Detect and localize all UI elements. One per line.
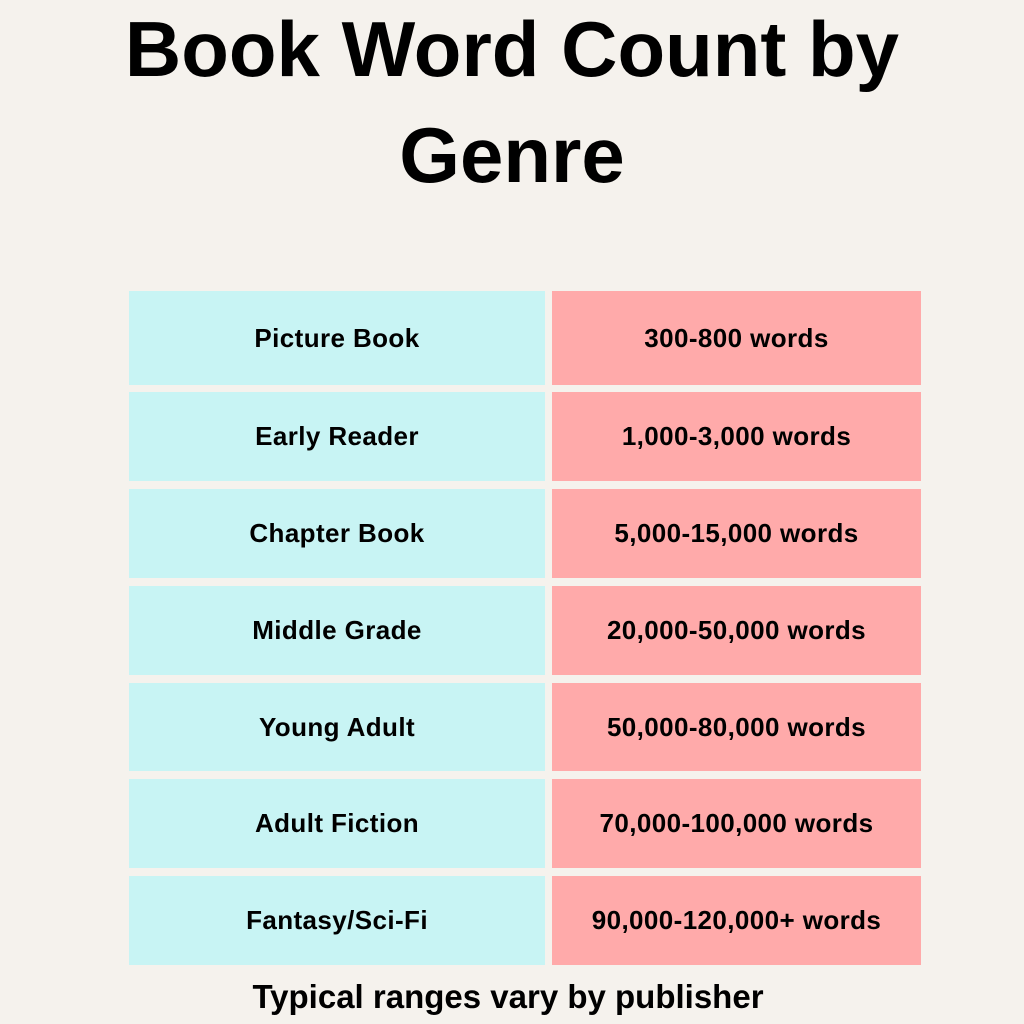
row: Young Adult: Young Adult [259, 712, 415, 742]
value: Adult Fiction: 70,000-100,000 words [600, 808, 873, 838]
value: Picture Book: 300-800 words [644, 322, 829, 352]
row: Adult Fiction: Adult Fiction [255, 808, 419, 838]
value: Young Adult [552, 683, 921, 771]
value: Chapter Book: 5,000-15,000 words [614, 518, 859, 548]
value: Middle Grade [552, 586, 921, 675]
row: Early Reader: Early Reader [255, 421, 419, 451]
value: Adult Fiction [552, 779, 921, 868]
value: Young Adult: 50,000-80,000 words [607, 712, 866, 742]
row: Middle Grade: Middle Grade [252, 615, 422, 645]
value: Chapter Book [552, 489, 921, 578]
value: Picture Book [552, 291, 921, 385]
row: Middle Grade [129, 586, 545, 675]
value: Early Reader: 1,000-3,000 words [622, 421, 851, 451]
row: Adult Fiction [129, 779, 545, 868]
value: Fantasy/Sci-Fi: 90,000-120,000+ words [592, 905, 881, 935]
row: Chapter Book [129, 489, 545, 578]
title [125, 5, 899, 199]
row: Early Reader [129, 392, 545, 481]
title: Genre [399, 111, 625, 199]
row: Fantasy/Sci-Fi: Fantasy/Sci-Fi [246, 905, 428, 935]
value: Fantasy/Sci-Fi [552, 876, 921, 965]
footer note: Typical ranges vary by publisher [252, 978, 764, 1015]
value: Early Reader [552, 392, 921, 481]
value: Middle Grade: 20,000-50,000 words [607, 615, 866, 645]
title: Book Word Count by [125, 5, 899, 93]
row: Chapter Book: Chapter Book [249, 518, 425, 548]
row: Fantasy/Sci-Fi [129, 876, 545, 965]
row: Young Adult [129, 683, 545, 771]
row: Picture Book: Picture Book [254, 322, 420, 352]
row: Picture Book [129, 291, 545, 385]
table [129, 291, 921, 965]
